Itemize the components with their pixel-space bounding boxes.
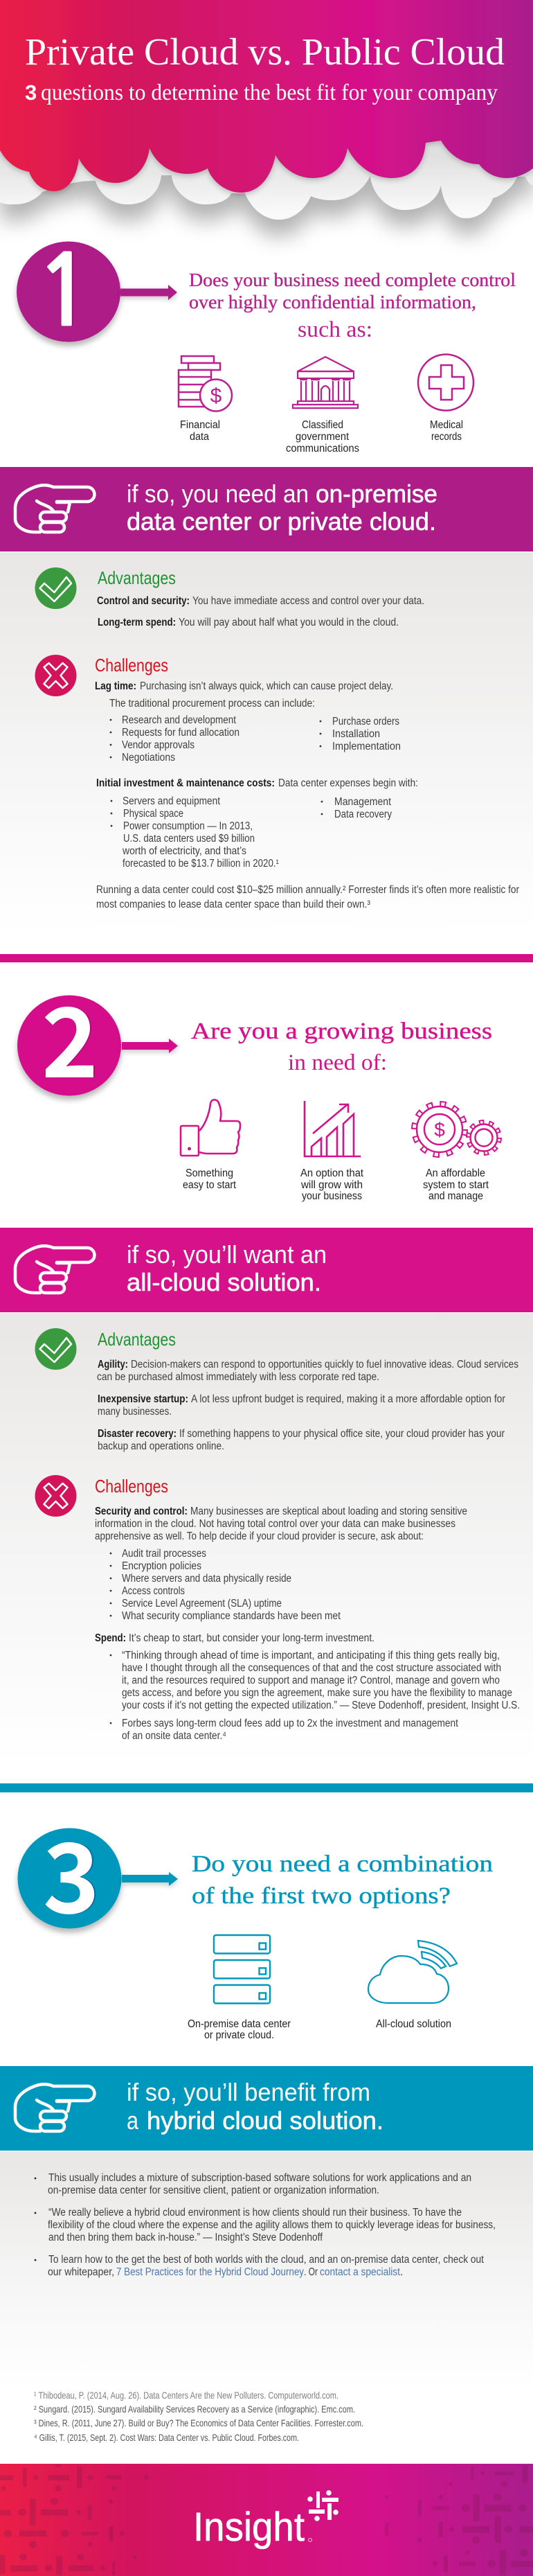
subtitle: 3 bbox=[25, 80, 37, 105]
icon: pointing hand bbox=[15, 485, 94, 532]
list: procurement process: Implementation bbox=[332, 741, 401, 752]
banner message: if so, you’ll benefit from bbox=[127, 2078, 370, 2106]
subtitle: questions to determine the best fit for your company bbox=[41, 80, 498, 105]
banner 3 bbox=[0, 2066, 533, 2151]
icon: check bbox=[35, 567, 76, 609]
banner message: data center or private cloud. bbox=[127, 507, 436, 536]
point: learn more: . bbox=[400, 2266, 403, 2278]
label: on-premise data center: or private cloud. bbox=[204, 2029, 274, 2041]
label: grow with your business: your business bbox=[302, 1190, 362, 1202]
banner message bbox=[127, 479, 437, 536]
question heading bbox=[189, 270, 516, 342]
footnotes: ¹ Thibodeau, P. (2014, Aug. 26). Data Centers Are the New Polluters. Computerworld.com. bbox=[34, 2390, 338, 2401]
icon: government building bbox=[293, 357, 358, 408]
challenge: initial investment: Initial investment & maintenance costs: bbox=[96, 777, 275, 789]
list: data center expenses: worth of electricity, and that’s bbox=[122, 845, 246, 857]
point: quote bbox=[35, 2207, 496, 2243]
advantage: long-term spend: Long-term spend: bbox=[98, 617, 176, 628]
list: procurement process: Research and development bbox=[122, 714, 237, 726]
advantage: control and security: You have immediate access and control over your data. bbox=[192, 595, 424, 607]
label: easy to start: Something bbox=[186, 1167, 233, 1179]
challenge: security and control bbox=[95, 1506, 467, 1542]
point: software mixture: on-premise data center for sensitive client, patient or organization information. bbox=[48, 2185, 379, 2196]
challenge: lag time: Purchasing isn’t always quick, which can cause project delay. bbox=[140, 680, 393, 692]
section 1: question bbox=[17, 241, 516, 455]
label: financial data bbox=[180, 419, 220, 443]
label: all-cloud solution: All-cloud solution bbox=[376, 2018, 451, 2030]
heading: challenges: Challenges bbox=[95, 1476, 168, 1497]
label: classified government communications bbox=[286, 419, 359, 455]
question heading: over highly confidential information, bbox=[189, 292, 476, 312]
quote: Steve Dodenhoff bbox=[110, 1650, 520, 1711]
challenge: initial investment: Data center expenses begin with: bbox=[278, 777, 418, 789]
icon: financial data: $ bbox=[210, 385, 222, 407]
icon: check bbox=[35, 1328, 76, 1370]
banner message bbox=[127, 1240, 327, 1296]
advantage: disaster recovery: Disaster recovery: bbox=[98, 1428, 177, 1440]
point: quote: and then bring them back in-house.” — Insight’s Steve Dodenhoff bbox=[48, 2232, 323, 2243]
label: affordable system: and manage bbox=[428, 1190, 483, 1202]
challenge: security and control: apprehensive as well. To help decide if your cloud provider is secure, ask about: bbox=[95, 1530, 424, 1542]
challenge: lag time bbox=[95, 680, 393, 709]
number badge 1: 1 bbox=[36, 244, 96, 341]
challenge: security and control: Many businesses are skeptical about loading and storing sensitive bbox=[190, 1506, 467, 1517]
point: learn more: contact a specialist bbox=[320, 2266, 401, 2278]
footnotes: ² Sungard. (2015). Sungard Availability Services Recovery as a Service (infographic). Emc.com. bbox=[34, 2403, 355, 2415]
question heading: Does your business need complete control bbox=[189, 270, 516, 290]
banner message bbox=[127, 2078, 383, 2135]
banner message: all-cloud solution. bbox=[127, 1268, 321, 1296]
point: learn more: our whitepaper, bbox=[48, 2266, 114, 2278]
heading: advantages: Advantages bbox=[98, 567, 176, 588]
point: learn more: . Or bbox=[304, 2266, 318, 2278]
number badge 1: 1 bbox=[35, 244, 94, 341]
advantage: inexpensive startup: Inexpensive startup: bbox=[98, 1393, 188, 1405]
list: procurement process: Vendor approvals bbox=[122, 739, 195, 751]
question heading: such as: bbox=[298, 317, 372, 342]
list: procurement process: Installation bbox=[332, 728, 380, 740]
label: financial data: data bbox=[190, 431, 209, 443]
label: grow with your business: An option that bbox=[300, 1167, 364, 1179]
icon: cross bbox=[35, 1475, 76, 1517]
footnotes bbox=[34, 2390, 363, 2443]
icon: growth chart bbox=[305, 1101, 361, 1156]
note: Forbes bbox=[110, 1718, 459, 1742]
point: learn more bbox=[35, 2254, 485, 2278]
list: data center expenses: U.S. data centers used $9 billion bbox=[123, 833, 255, 845]
number badge 2: 2 bbox=[42, 967, 98, 1106]
list: security questions: Audit trail processes bbox=[122, 1548, 206, 1560]
list: data center expenses: Power consumption — In 2013, bbox=[123, 820, 253, 832]
logo: Insight: Insight bbox=[193, 2505, 305, 2550]
challenge: spend: Spend: bbox=[95, 1632, 126, 1644]
banner 1 bbox=[0, 467, 533, 552]
banner message: a bbox=[127, 2106, 139, 2135]
text: running cost: most companies to lease data center space than build their own.³ bbox=[96, 899, 370, 910]
list: data center expenses: Physical space bbox=[123, 808, 183, 820]
label: grow with your business: will grow with bbox=[300, 1179, 363, 1191]
label: easy to start: easy to start bbox=[183, 1179, 237, 1191]
label: grow with your business bbox=[300, 1167, 364, 1202]
label: affordable system: An affordable bbox=[426, 1167, 485, 1179]
advantage: long-term spend: You will pay about half what you would in the cloud. bbox=[179, 617, 399, 628]
list: data center expenses: Data recovery bbox=[334, 809, 392, 820]
list: procurement process: Negotiations bbox=[122, 752, 175, 764]
point: learn more: To learn how to the get the best of both worlds with the cloud, and an on-premise data center, check out bbox=[48, 2254, 485, 2266]
banner message: on-premise bbox=[316, 479, 437, 508]
point: software mixture bbox=[35, 2172, 471, 2196]
challenge: lag time: The traditional procurement process can include: bbox=[109, 698, 315, 709]
question heading bbox=[191, 1018, 492, 1075]
heading: advantages: Advantages bbox=[98, 1329, 176, 1350]
point: software mixture: This usually includes a mixture of subscription-based software solutions for work applications and an bbox=[48, 2172, 471, 2184]
arrow bbox=[122, 1039, 178, 1053]
label: on-premise data center: On-premise data center bbox=[188, 2018, 291, 2030]
challenge: initial investment bbox=[96, 777, 418, 789]
icon: cross bbox=[35, 655, 76, 696]
note: Forbes: of an onsite data center.⁴ bbox=[122, 1730, 226, 1742]
panel: private cloud advantages and challenges bbox=[0, 552, 533, 933]
label: medical records: Medical bbox=[430, 419, 463, 431]
challenge: spend: It’s cheap to start, but consider your long-term investment. bbox=[129, 1632, 374, 1644]
panel: public cloud advantages and challenges bbox=[0, 1313, 533, 1763]
note: Forbes: Forbes says long-term cloud fees add up to 2x the investment and management bbox=[122, 1718, 459, 1729]
arrow bbox=[122, 1872, 178, 1886]
header cloud banner bbox=[0, 0, 533, 193]
advantage: control and security: Control and security: bbox=[97, 595, 190, 607]
banner message: if so, you’ll want an bbox=[127, 1240, 327, 1269]
icon: gears with dollar: $ bbox=[434, 1119, 445, 1140]
label: medical records: records bbox=[431, 431, 462, 443]
banner message: hybrid cloud solution. bbox=[147, 2106, 383, 2135]
footnotes: ³ Dines, R. (2011, June 27). Build or Buy? The Economics of Data Center Facilities. Forrester.com. bbox=[34, 2417, 363, 2428]
label: on-premise data center bbox=[188, 2018, 291, 2041]
icon: pointing hand bbox=[15, 2084, 94, 2131]
label: classified government communications: communications bbox=[286, 443, 359, 455]
list: security questions: What security compliance standards have been met bbox=[122, 1610, 341, 1622]
label: medical records bbox=[430, 419, 463, 443]
advantage: inexpensive startup bbox=[98, 1393, 505, 1418]
section 3: question bbox=[18, 1802, 493, 2041]
logo: Insight bbox=[193, 2490, 338, 2550]
advantage: disaster recovery: backup and operations online. bbox=[98, 1440, 224, 1452]
banner message: if so, you need an bbox=[127, 479, 309, 508]
label: easy to start bbox=[183, 1167, 237, 1191]
advantage: inexpensive startup: many businesses. bbox=[98, 1406, 172, 1418]
advantage: agility: can be purchased almost immediately with less corporate red tape. bbox=[97, 1371, 379, 1383]
icon: financial data bbox=[179, 356, 232, 412]
advantage: inexpensive startup: A lot less upfront budget is required, making it a more affordable option for bbox=[191, 1393, 505, 1405]
paper cloud layer bbox=[0, 139, 533, 220]
icon: thumbs up bbox=[181, 1100, 240, 1156]
list: security questions: Access controls bbox=[122, 1585, 185, 1597]
title: Private Cloud vs. Public Cloud bbox=[25, 30, 505, 73]
number badge 3: 3 bbox=[44, 1802, 101, 1941]
advantage: agility bbox=[97, 1359, 518, 1383]
list: security questions: Where servers and data physically reside bbox=[122, 1573, 291, 1585]
list: security questions: Service Level Agreement (SLA) uptime bbox=[122, 1598, 282, 1609]
list: data center expenses: Servers and equipment bbox=[123, 795, 221, 807]
number badge 1 bbox=[17, 241, 120, 342]
challenge: security and control: information in the cloud. Not having total control over your data can make businesses bbox=[95, 1518, 455, 1530]
label: classified government communications: government bbox=[296, 431, 350, 443]
number badge 2: 2 bbox=[43, 967, 100, 1106]
quote: Steve Dodenhoff: “Thinking through ahead of time is important, and anticipating if this thing gets really big, bbox=[122, 1650, 500, 1661]
label: affordable system bbox=[423, 1167, 489, 1202]
icon: pointing hand bbox=[15, 1246, 94, 1293]
label: classified government communications: Classified bbox=[302, 419, 343, 431]
list: data center expenses bbox=[111, 795, 392, 870]
list: procurement process: Purchase orders bbox=[332, 716, 399, 727]
arrow bbox=[120, 285, 177, 300]
text: running cost bbox=[96, 884, 519, 910]
question heading: Are you a growing business bbox=[191, 1018, 492, 1044]
footnotes: ⁴ Gillis, T. (2015, Sept. 2). Cost Wars: Data Center vs. Public Cloud. Forbes.com. bbox=[34, 2432, 299, 2443]
footer band bbox=[0, 2464, 533, 2576]
list: procurement process: Requests for fund allocation bbox=[122, 727, 240, 739]
number badge 3: 3 bbox=[43, 1802, 100, 1941]
number badge 2 bbox=[17, 967, 121, 1106]
question heading: of the first two options? bbox=[192, 1883, 451, 1909]
banner 2 bbox=[0, 1228, 533, 1312]
icon: medical cross bbox=[418, 355, 473, 410]
advantage: control and security bbox=[97, 595, 424, 607]
advantage: long-term spend bbox=[98, 617, 399, 628]
question heading bbox=[192, 1851, 493, 1909]
advantage: disaster recovery bbox=[98, 1428, 505, 1452]
icon: server stack bbox=[214, 1935, 270, 2004]
label: financial data: Financial bbox=[180, 419, 220, 431]
list: data center expenses: Management bbox=[334, 796, 392, 808]
panel: hybrid cloud details bbox=[0, 2152, 533, 2388]
challenge: lag time: Lag time: bbox=[95, 680, 136, 692]
label: affordable system: system to start bbox=[423, 1179, 489, 1191]
challenge: security and control: Security and control: bbox=[95, 1506, 188, 1517]
question heading: Do you need a combination bbox=[192, 1851, 493, 1877]
list: data center expenses: forecasted to be $13.7 billion in 2020.¹ bbox=[123, 858, 279, 870]
advantage: agility: Agility: bbox=[98, 1359, 128, 1370]
question heading: in need of: bbox=[288, 1050, 387, 1075]
icon: gears with dollar bbox=[415, 1104, 499, 1154]
list: procurement process bbox=[110, 714, 401, 764]
section 2: question bbox=[17, 967, 499, 1202]
list: security questions bbox=[110, 1548, 341, 1622]
icon: wireless cloud bbox=[368, 1941, 457, 2003]
list: security questions: Encryption policies bbox=[122, 1560, 201, 1572]
heading: challenges: Challenges bbox=[95, 655, 168, 676]
point: learn more: 7 Best Practices for the Hybrid Cloud Journey bbox=[116, 2266, 304, 2278]
point: quote: “We really believe a hybrid cloud environment is how clients should run their business. To have the bbox=[48, 2207, 462, 2218]
number badge 3 bbox=[18, 1802, 122, 1941]
